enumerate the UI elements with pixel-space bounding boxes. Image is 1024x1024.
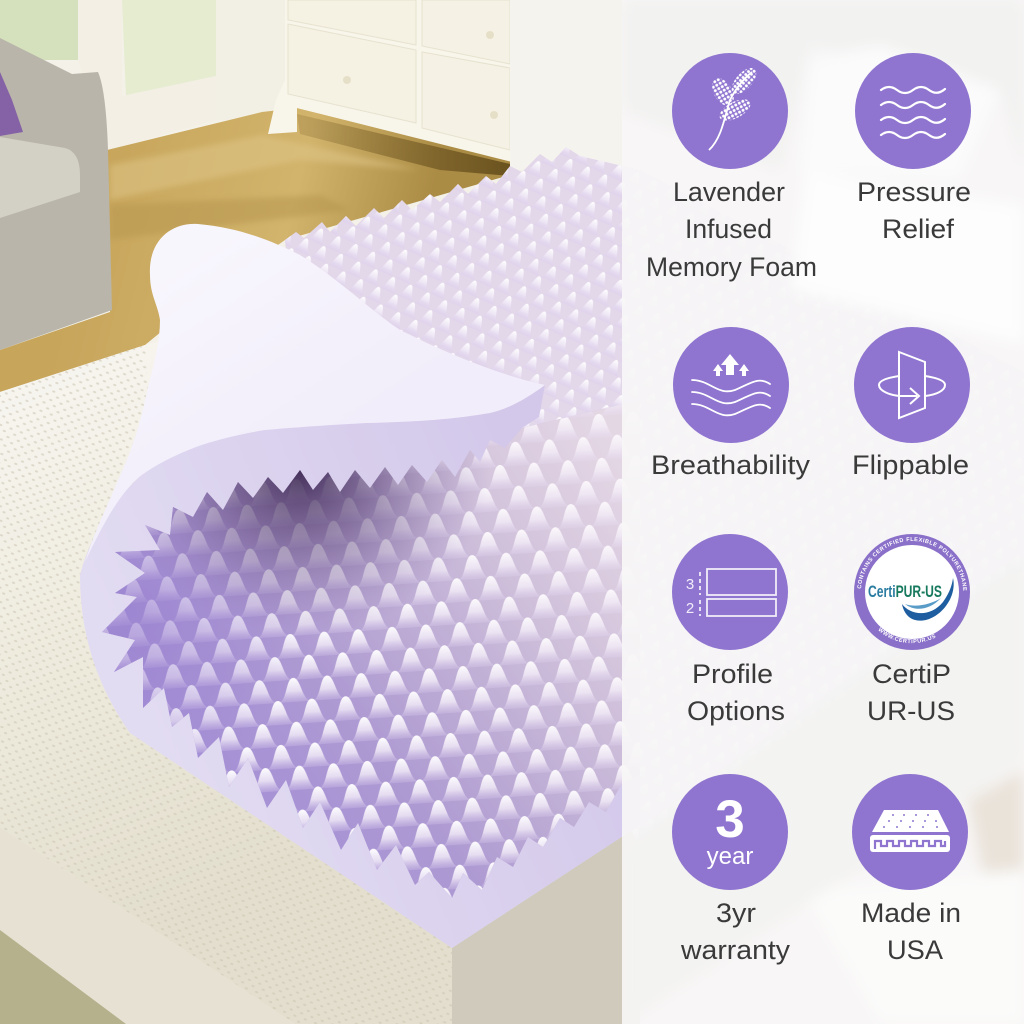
foam rolled flap top <box>85 224 545 562</box>
wall column <box>510 0 622 170</box>
label: flippable: Flippable <box>852 450 969 480</box>
label: 3yr warranty <box>680 898 791 965</box>
label: pressure relief: Pressure <box>857 177 971 207</box>
wood floor <box>0 108 510 392</box>
label: certipur-us: CertiP <box>872 659 951 689</box>
mattress quilted top <box>0 300 640 1024</box>
icon: profile thickness: 3 <box>686 576 694 593</box>
feature: certipur-us <box>854 534 970 726</box>
dresser <box>268 0 512 162</box>
label: made in usa: USA <box>887 935 943 965</box>
label: lavender infused memory foam: Lavender <box>673 177 785 207</box>
icon: 3 year badge: year <box>707 843 753 870</box>
foam topper <box>80 147 622 948</box>
icon: profile thickness: 2 <box>686 600 694 617</box>
icon: certipur-us seal: WWW.CERTIPUR.US <box>878 627 936 644</box>
label: profile options: Options <box>687 696 785 726</box>
label: made in usa <box>861 898 961 965</box>
feature: 3 year warranty <box>672 774 791 965</box>
icon: mattress layers <box>852 774 968 890</box>
label: 3yr warranty: warranty <box>680 935 791 965</box>
icon: certipur-us seal: CertiPUR-US <box>868 582 942 601</box>
label: pressure relief: Relief <box>882 214 955 244</box>
feature: flippable <box>852 327 970 480</box>
feature: made in usa <box>852 774 968 965</box>
foam side band <box>80 385 640 948</box>
label: certipur-us: UR-US <box>867 696 955 726</box>
translucent right panel <box>622 0 1024 1024</box>
feature: pressure relief <box>855 53 971 244</box>
mattress right face <box>452 825 640 1024</box>
icon: 3 year badge <box>672 774 788 890</box>
label: lavender infused memory foam <box>646 177 817 282</box>
foam back surface <box>285 147 1024 850</box>
icon: pressure waves <box>855 53 971 169</box>
icon: rotating panel <box>854 327 970 443</box>
label: 3yr warranty: 3yr <box>716 898 756 928</box>
feature: profile options <box>672 534 788 726</box>
label: made in usa: Made in <box>861 898 961 928</box>
label: profile options: Profile <box>692 659 773 689</box>
icon: certipur-us seal <box>854 534 970 650</box>
mattress lower band <box>0 827 295 1024</box>
label: lavender infused memory foam: Memory Foam <box>646 252 817 282</box>
carpet <box>0 930 126 1024</box>
sofa <box>0 38 112 350</box>
foam front surface with eggcrate pattern <box>102 404 622 898</box>
feature: lavender infused memory foam <box>646 53 817 282</box>
label: profile options <box>687 659 785 726</box>
label: pressure relief <box>857 177 971 244</box>
label: lavender infused memory foam: Infused <box>685 214 772 244</box>
mattress <box>0 300 640 1024</box>
feature: breathability <box>651 327 811 480</box>
icon: 3 year badge: 3 <box>715 790 745 849</box>
icon: certipur-us seal: CONTAINS CERTIFIED FLEXIBLE POLYURETHANE FOAM <box>857 537 967 591</box>
label: certipur-us <box>867 659 955 726</box>
label: breathability: Breathability <box>651 450 811 480</box>
icon: profile thickness <box>672 534 788 650</box>
icon: lavender sprig <box>672 53 788 169</box>
icon: breathability arrows and airflow <box>673 327 789 443</box>
